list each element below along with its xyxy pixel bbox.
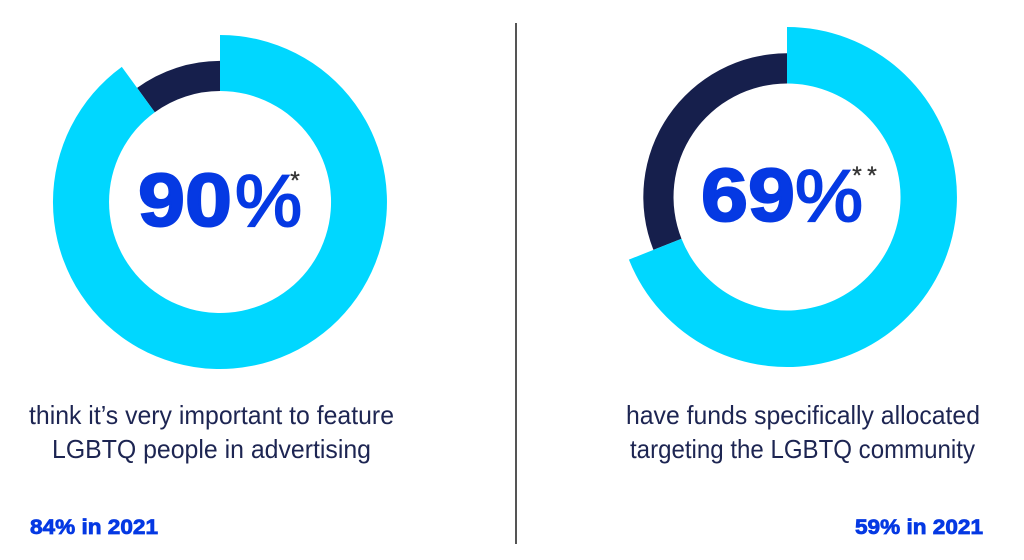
donut chart: 69 percent (629, 27, 957, 367)
big number: 69%: 69 (701, 153, 795, 237)
divider (515, 23, 517, 544)
description text: LGBTQ people in advertising (52, 434, 371, 464)
comparison: 2021 value: 84% in 2021 (30, 515, 158, 539)
donut chart: 90 percent (53, 35, 387, 369)
big number: 90%: % (235, 161, 302, 242)
footnote marker: * (867, 162, 877, 190)
panel: left statistic (29, 35, 401, 539)
big number: 90%: 90 (138, 158, 232, 242)
comparison: 2021 value: 59% in 2021 (855, 515, 983, 539)
panel: right statistic (626, 27, 987, 539)
description text: think it’s very important to feature (29, 400, 394, 430)
big number: 69%: % (795, 156, 863, 237)
footnote marker: * (852, 162, 862, 190)
footnote marker: * (290, 167, 300, 195)
description text: have funds specifically allocated (626, 400, 980, 430)
description text: targeting the LGBTQ community (630, 434, 975, 464)
